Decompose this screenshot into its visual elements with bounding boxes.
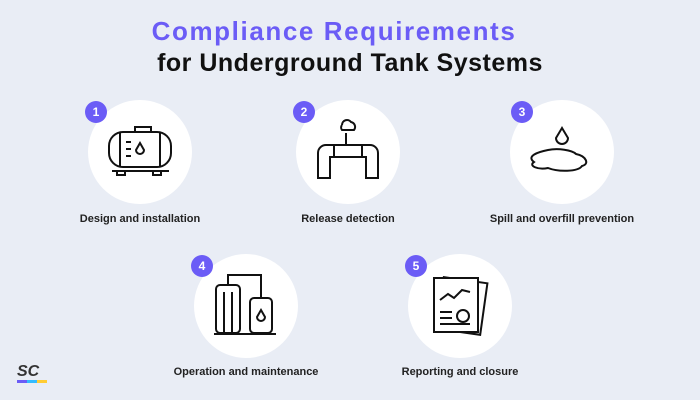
subtitle: for Underground Tank Systems xyxy=(157,49,543,77)
text: 5 xyxy=(413,259,419,273)
item 5 xyxy=(402,254,518,378)
item 1 xyxy=(80,100,200,225)
item 4 xyxy=(174,254,318,378)
text: 1 xyxy=(93,105,99,119)
title: Compliance Requirements xyxy=(152,16,516,46)
text: 2 xyxy=(301,105,307,119)
label 3: Spill and overfill prevention xyxy=(490,213,634,225)
item 2 xyxy=(293,100,400,225)
label 1: Design and installation xyxy=(80,213,200,225)
item 3 xyxy=(490,100,634,225)
label 4: Operation and maintenance xyxy=(174,366,318,378)
text: 4 xyxy=(199,259,205,273)
logo xyxy=(17,363,47,383)
logo: SC xyxy=(17,363,39,380)
text: 3 xyxy=(519,105,525,119)
label 5: Reporting and closure xyxy=(402,366,518,378)
label 2: Release detection xyxy=(301,213,395,225)
